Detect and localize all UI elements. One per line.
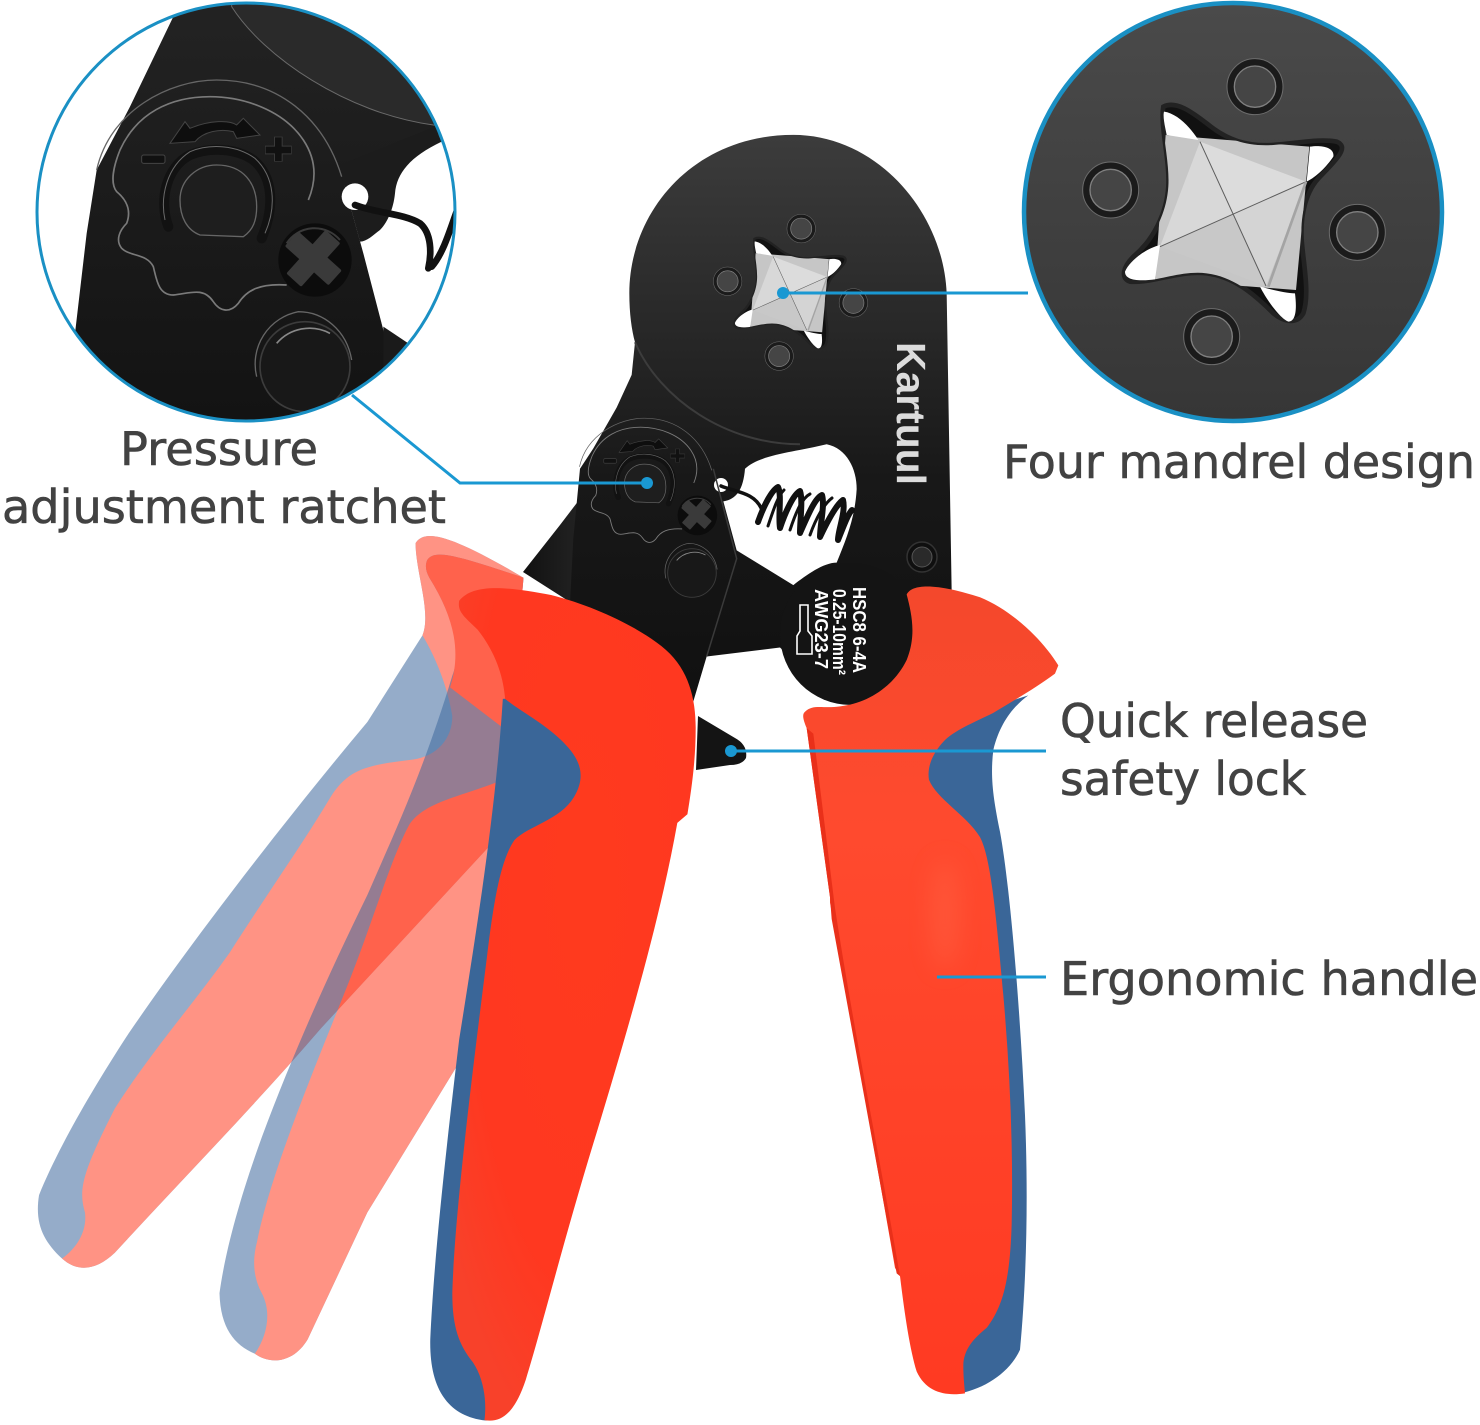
spring hook: [355, 205, 458, 268]
panel: pressure ratchet close-up: [37, 0, 470, 440]
ghost handle: middle motion trail: [219, 555, 523, 1360]
plate silhouette: [75, 5, 438, 420]
head disc edge: [635, 342, 800, 444]
lever plate outline: [707, 469, 737, 657]
right handle: [803, 586, 1058, 1394]
spring lug arm: [337, 127, 442, 242]
brand name: Kartuul: Kartuul: [888, 342, 934, 485]
quick release latch: [696, 716, 746, 770]
label: quick release safety lock: Quick release: [1060, 694, 1368, 748]
right handle red cover: [803, 586, 1058, 1394]
lower blade: [383, 326, 408, 365]
label: quick release safety lock: safety lock: [1060, 752, 1306, 806]
tool head and body: [570, 135, 952, 710]
callout line: four mandrel: [777, 287, 1028, 299]
spring hole: [714, 478, 728, 492]
callout line: handle: [937, 976, 1046, 978]
enlarged mandrels and bolts: [1083, 59, 1385, 365]
label: pressure adjustment ratchet: [2, 422, 446, 534]
blade wedge behind jaw: [523, 470, 602, 602]
icon: ferrule: [797, 605, 812, 654]
label: pressure adjustment ratchet: Pressure: [120, 422, 318, 476]
ghost handle: far left motion trail: [38, 536, 523, 1268]
right handle highlight: [931, 860, 959, 970]
model dial: [780, 563, 922, 705]
model text: HSC8 6-4A: [849, 587, 869, 673]
label: ergonomic handle: Ergonomic handle: [1060, 952, 1478, 1006]
left handle blue grip: [430, 693, 684, 1420]
spring: [721, 486, 852, 540]
head disc: [231, 5, 434, 126]
four mandrel die on tool: [713, 214, 868, 370]
rivet: [907, 542, 937, 572]
right handle side ridge: [807, 728, 900, 1276]
left handle red cover: [452, 588, 696, 1421]
callout line: safety lock: [725, 745, 1046, 757]
gauge text: AWG23-7: [811, 589, 831, 669]
label: pressure adjustment ratchet: adjustment ratchet: [2, 480, 446, 534]
right handle blue grip: [880, 695, 1028, 1393]
panel: four mandrel close-up: [1024, 3, 1442, 421]
left circle border: [37, 3, 455, 421]
label: four mandrel design: Four mandrel design: [1003, 435, 1475, 489]
size text: 0.25-10mm²: [829, 589, 849, 675]
spring window: [723, 444, 857, 585]
label: quick release safety lock: [1060, 694, 1368, 806]
left handle: [430, 588, 696, 1421]
pressure adjustment ratchet on tool: [579, 418, 719, 597]
enlarged ratchet dial: [97, 80, 355, 412]
hook hole: [342, 183, 368, 210]
callout line: ratchet: [352, 395, 653, 489]
